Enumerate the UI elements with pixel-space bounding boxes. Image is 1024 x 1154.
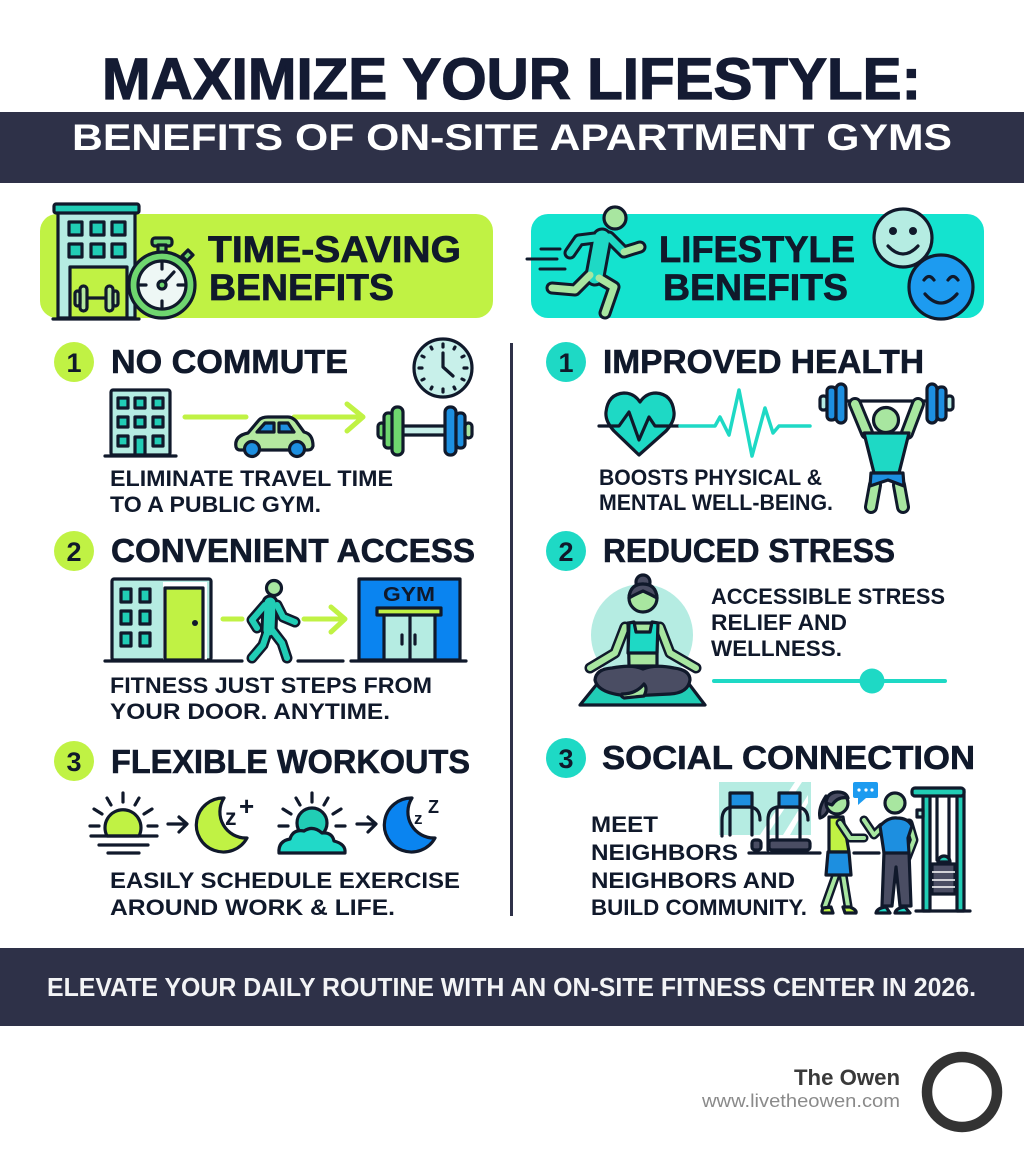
- icon: sunrise: [90, 793, 157, 853]
- icon: gym building: GYM: [383, 584, 435, 606]
- description: [110, 673, 432, 724]
- icon: gym mirror and treadmills: [719, 782, 879, 853]
- icon: walking person: [252, 580, 295, 658]
- number badge 2: [54, 531, 94, 571]
- panel: lifestyle benefits header: [527, 207, 984, 319]
- icon: weightlifter: [820, 384, 953, 507]
- icon: apartment building: [105, 390, 176, 456]
- icon: light smiley: [874, 209, 932, 267]
- icon: blue moon with z: z: [414, 809, 422, 828]
- footer band: ELEVATE YOUR DAILY ROUTINE WITH AN ON-SITE FITNESS CENTER IN 2026.: [47, 972, 976, 1002]
- heading: benefits: BENEFITS: [663, 267, 848, 308]
- description: [110, 466, 393, 517]
- arrow: [304, 607, 345, 632]
- description: FITNESS JUST STEPS FROM: [110, 673, 432, 698]
- description: NEIGHBORS AND: [591, 868, 795, 893]
- panel: time-saving benefits header: [40, 204, 493, 319]
- description: BOOSTS PHYSICAL &: [599, 465, 822, 490]
- brand url: www.livetheowen.com: [701, 1091, 900, 1111]
- icon: meditating woman: [580, 575, 705, 705]
- title: MAXIMIZE YOUR LIFESTYLE:: [102, 47, 921, 112]
- icon: man talking: [864, 793, 914, 913]
- icon: cable machine: [912, 788, 970, 911]
- number badge 2: 2: [66, 537, 82, 567]
- subtitle band: BENEFITS OF ON-SITE APARTMENT GYMS: [72, 117, 952, 158]
- icon: heart with pulse: [599, 393, 679, 455]
- item: reduced stress: [546, 531, 945, 705]
- number badge 1: 1: [558, 348, 574, 378]
- number badge 3: [546, 738, 586, 778]
- item: improved health: [546, 342, 953, 515]
- item: no commute: [54, 339, 472, 517]
- icon: runner: [527, 207, 640, 313]
- item: convenient access: [54, 531, 475, 724]
- pulse line: [680, 390, 810, 456]
- number badge 1: [54, 342, 94, 382]
- heading: time-saving: TIME-SAVING: [208, 229, 461, 270]
- heading: FLEXIBLE WORKOUTS: [111, 743, 470, 780]
- heading: IMPROVED HEALTH: [603, 343, 924, 380]
- heading: SOCIAL CONNECTION: [602, 739, 975, 776]
- icon: woman talking: [820, 792, 864, 913]
- number badge 3: 3: [66, 747, 82, 777]
- heading: lifestyle: LIFESTYLE: [659, 229, 855, 270]
- arrow segment: [223, 616, 242, 622]
- heading: NO COMMUTE: [111, 343, 348, 380]
- icon: stopwatch: [129, 238, 195, 318]
- heading: CONVENIENT ACCESS: [111, 532, 475, 569]
- number badge 3: 3: [558, 744, 574, 774]
- description: NEIGHBORS: [591, 840, 738, 865]
- description: ACCESSIBLE STRESS: [711, 584, 945, 609]
- icon: blue moon with z: [384, 797, 439, 852]
- slider: [714, 668, 945, 694]
- description: ELIMINATE TRAVEL TIME: [110, 466, 393, 491]
- icon: crescent moon with z: z: [225, 804, 236, 830]
- divider: [510, 343, 513, 916]
- subtitle band: [0, 112, 1024, 183]
- ground lines: [105, 659, 466, 663]
- heading: REDUCED STRESS: [603, 532, 895, 569]
- icon: wall clock: [414, 339, 472, 397]
- icon: dumbbell: [378, 407, 472, 455]
- arrow: [185, 404, 363, 431]
- number badge 3: [54, 741, 94, 781]
- icon: car: [236, 417, 313, 456]
- arrow: [357, 817, 376, 832]
- item: social connection: [546, 738, 975, 920]
- brand name: The Owen: [794, 1065, 900, 1090]
- item: flexible workouts: [54, 741, 470, 920]
- footer band: [0, 948, 1024, 1026]
- description: [599, 465, 833, 515]
- number badge 1: [546, 342, 586, 382]
- icon: apartment building with gym: [53, 204, 139, 319]
- arrow: [168, 817, 187, 832]
- description: [591, 812, 807, 920]
- icon: sun behind cloud: [279, 793, 345, 853]
- heading: benefits: BENEFITS: [209, 267, 394, 308]
- icon: blue moon with z: Z: [428, 797, 439, 817]
- description: [711, 584, 945, 661]
- description: [110, 868, 460, 920]
- logo ring: [927, 1057, 997, 1127]
- description: MENTAL WELL-BEING.: [599, 490, 833, 515]
- icon: crescent moon with z: +: [239, 791, 254, 821]
- description: TO A PUBLIC GYM.: [110, 492, 321, 517]
- description: BUILD COMMUNITY.: [591, 895, 807, 920]
- description: MEET: [591, 812, 658, 837]
- description: AROUND WORK & LIFE.: [110, 895, 395, 920]
- icon: gym building: [359, 579, 460, 660]
- description: EASILY SCHEDULE EXERCISE: [110, 868, 460, 893]
- icon: blue smiley: [909, 255, 973, 319]
- icon: crescent moon with z: [196, 791, 254, 852]
- description: RELIEF AND: [711, 610, 847, 635]
- description: WELLNESS.: [711, 636, 842, 661]
- number badge 2: 2: [558, 537, 574, 567]
- description: YOUR DOOR. ANYTIME.: [110, 699, 390, 724]
- number badge 1: 1: [66, 348, 82, 378]
- icon: speech bubble: [853, 782, 878, 805]
- number badge 2: [546, 531, 586, 571]
- icon: apartment door: [112, 579, 211, 660]
